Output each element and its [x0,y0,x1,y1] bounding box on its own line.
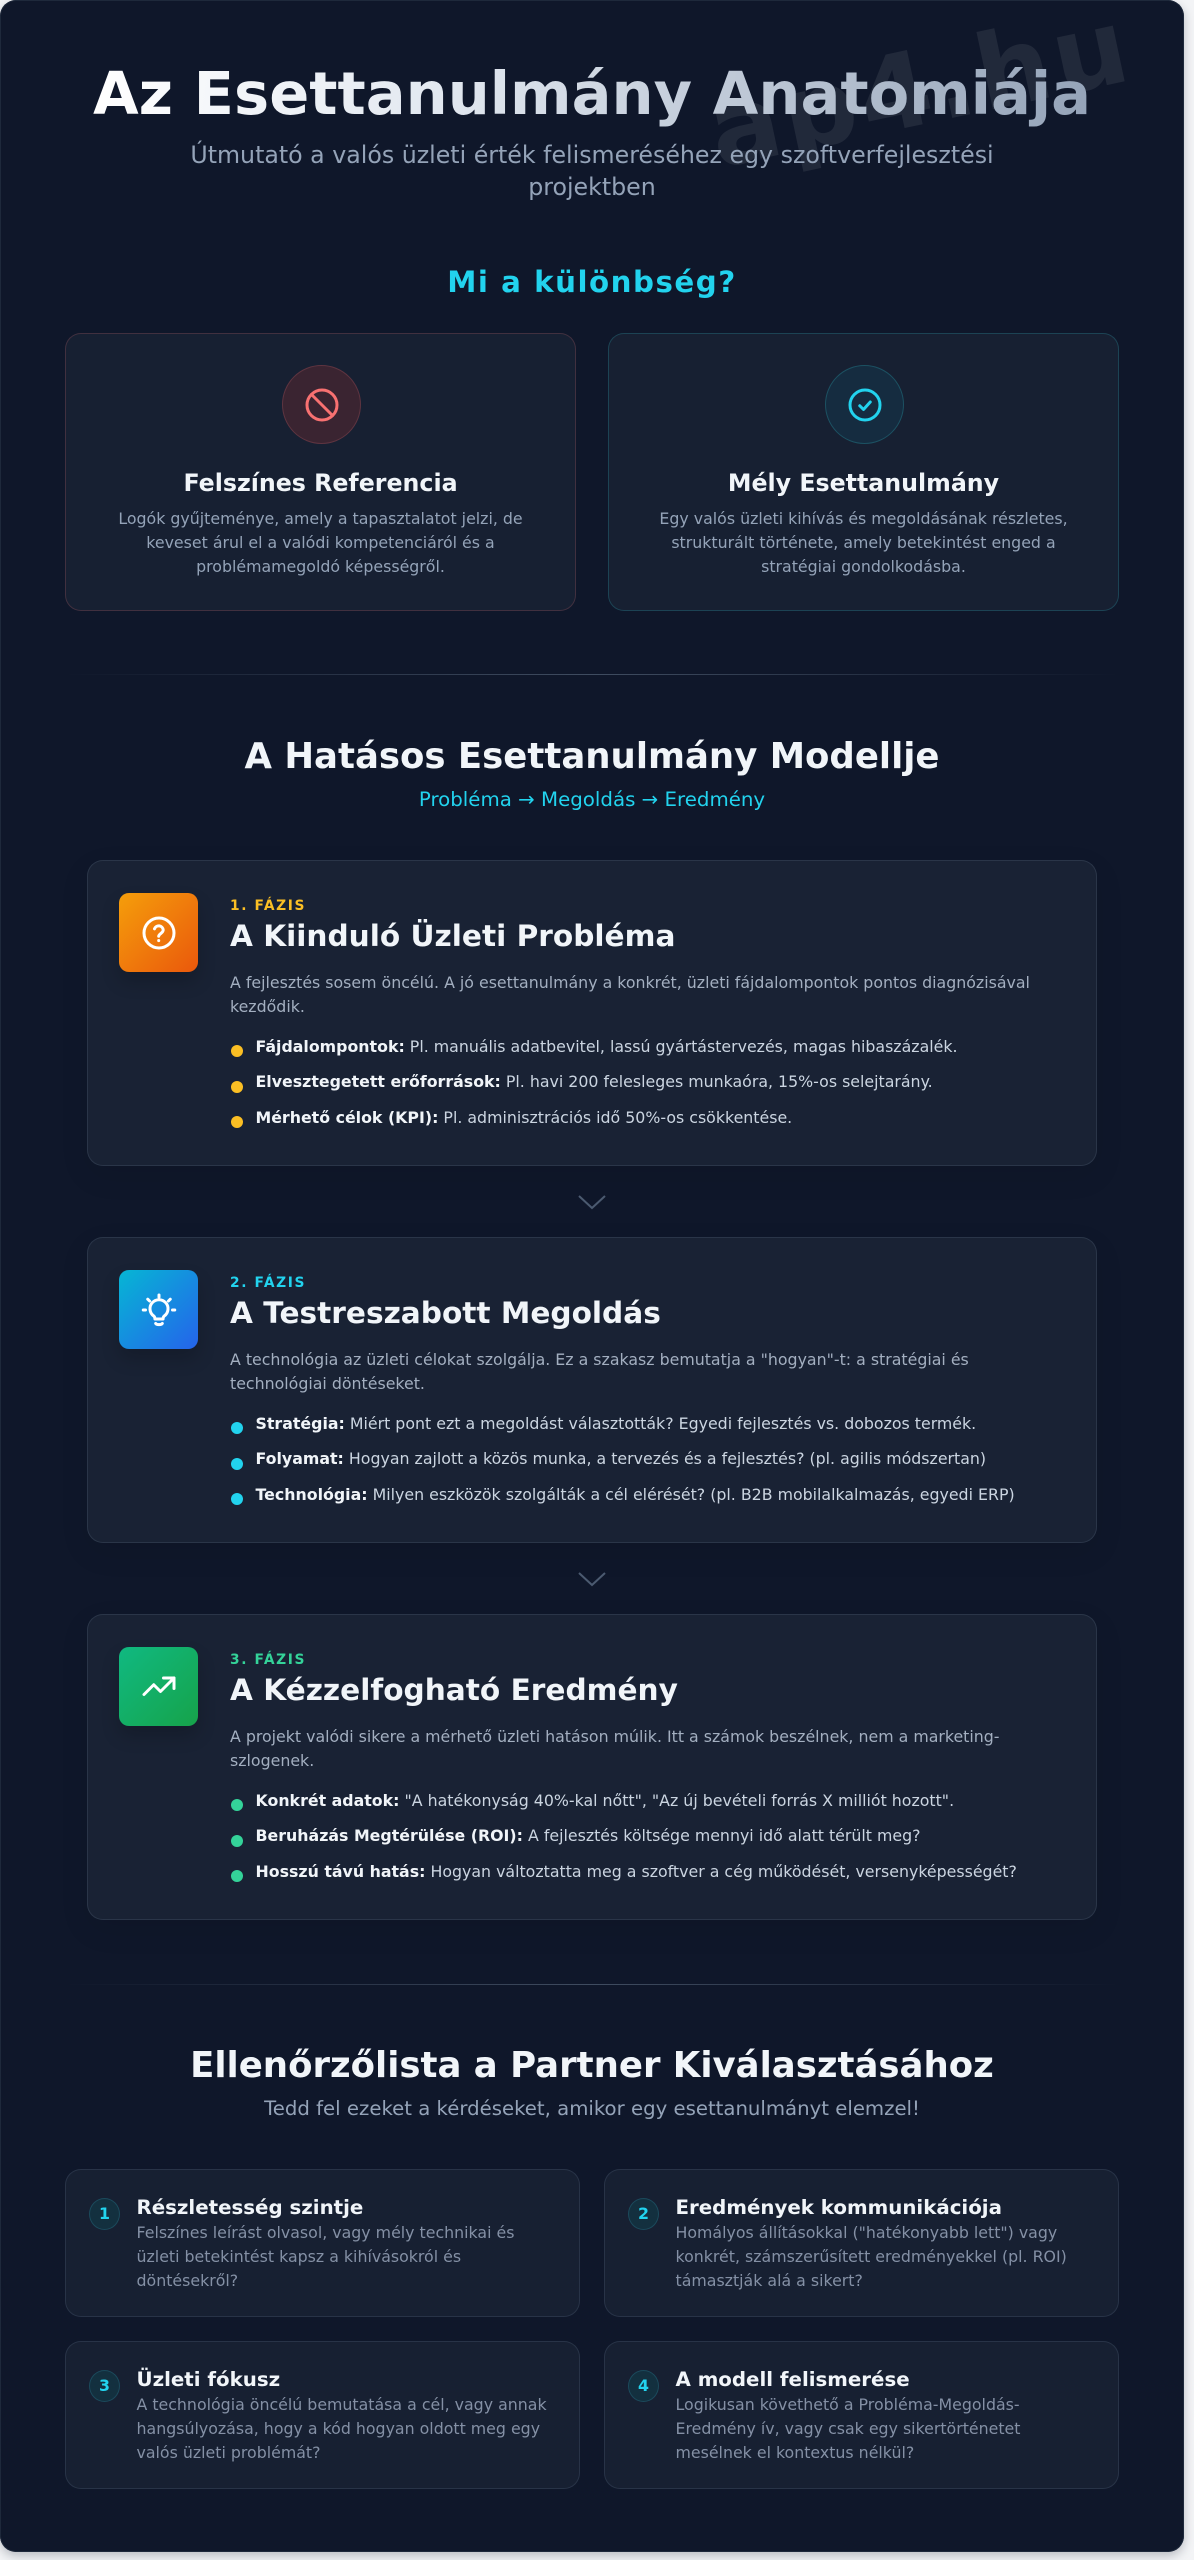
description: keveset árul el a valódi kompetenciáról és a [146,532,495,552]
number badge: 1 [99,2204,110,2223]
number badge [89,2198,120,2230]
description: strukturált története, amely betekintést enged a [671,532,1056,552]
phase label: 2. FÁZIS [230,1274,306,1290]
checklist card 3 [65,2341,580,2489]
bullet marker [231,1799,243,1811]
description [118,508,523,576]
description: mesélnek el kontextus nélkül? [676,2443,914,2462]
description [230,973,1030,1016]
panel: phase 2 [87,1237,1097,1543]
description: Logikusan követhető a Probléma-Megoldás- [676,2395,1020,2414]
description [676,2223,1067,2290]
description: valós üzleti problémát? [136,2443,320,2462]
bullet: Hosszú távú hatás: Hogyan változtatta meg a szoftver a cég működését, versenyképességét? [256,1862,1017,1880]
description: konkrét, számszerűsített eredményekkel (pl. ROI) [676,2247,1067,2266]
number badge: 2 [638,2204,649,2223]
number badge [89,2370,120,2402]
description: Felszínes leírást olvasol, vagy mély technikai és [136,2223,514,2242]
description: stratégiai gondolkodásba. [761,556,966,576]
model subtitle: Probléma → Megoldás → Eredmény [419,788,765,811]
description: szlogenek. [230,1751,314,1770]
arrow: chevron down [578,1195,606,1210]
bullet marker [231,1422,243,1434]
icon: ban [282,365,361,444]
checklist card 4 [604,2341,1119,2489]
icon: trending up [119,1647,198,1726]
checklist subtitle: Tedd fel ezeket a kérdéseket, amikor egy esettanulmányt elemzel! [264,2097,920,2120]
bullet: Beruházás Megtérülése (ROI): A fejlesztés költsége mennyi idő alatt térült meg? [256,1826,921,1844]
heading: A Kiinduló Üzleti Probléma [230,919,675,953]
description: A fejlesztés sosem öncélú. A jó esettanulmány a konkrét, üzleti fájdalompontok pontos diagnózisával [230,973,1030,992]
description: A technológia öncélú bemutatása a cél, vagy annak [136,2395,547,2414]
phase label: 1. FÁZIS [230,898,306,914]
icon: check [825,365,904,444]
bullet marker [231,1045,243,1057]
panel: surface reference [65,333,576,611]
description [676,2395,1020,2462]
subtitle [190,140,994,201]
bullet marker [231,1458,243,1470]
description: Egy valós üzleti kihívás és megoldásának részletes, [659,508,1068,528]
bullet: Folyamat: Hogyan zajlott a közös munka, a tervezés és a fejlesztés? (pl. agilis módszertan) [256,1448,986,1468]
bullet: Elvesztegetett erőforrások: Pl. havi 200 felesleges munkaóra, 15%-os selejtarány. [256,1072,933,1090]
bullet marker [231,1493,243,1505]
number badge: 3 [99,2376,110,2395]
heading: Mély Esettanulmány [728,469,999,497]
bullet: Technológia: Milyen eszközök szolgálták a cél elérését? (pl. B2B mobilalkalmazás, egyedi ERP) [256,1484,1015,1504]
panel: phase 1 [87,860,1097,1166]
bullet: Stratégia: Miért pont ezt a megoldást választották? Egyedi fejlesztés vs. dobozos termék. [256,1414,976,1432]
heading: A modell felismerése [676,2368,910,2391]
phase label: 3. FÁZIS [230,1652,306,1668]
number badge [628,2370,659,2402]
description [230,1727,1000,1770]
icon: question [119,893,198,972]
subtitle: Útmutató a valós üzleti érték felismeréséhez egy szoftverfejlesztési [190,141,994,169]
checklist card 1 [65,2169,580,2317]
description: Eredmény ív, vagy csak egy sikertörténetet [676,2419,1020,2438]
description: hangsúlyozása, hogy a kód hogyan oldott meg egy [136,2419,540,2438]
heading: Részletesség szintje [136,2196,363,2219]
heading: A Testreszabott Megoldás [230,1296,661,1330]
description: Homályos állításokkal ("hatékonyabb lett") vagy [676,2223,1057,2242]
description: kezdődik. [230,997,305,1016]
heading: Felszínes Referencia [183,469,458,497]
icon: lightbulb [119,1270,198,1349]
description: A projekt valódi sikere a mérhető üzleti hatáson múlik. Itt a számok beszélnek, nem a marketing- [230,1727,1000,1746]
bullet marker [231,1081,243,1093]
heading: checklist: Ellenőrzőlista a Partner Kiválasztásához [190,2045,994,2086]
heading: Eredmények kommunikációja [676,2196,1002,2219]
description [659,508,1068,576]
heading: model: A Hatásos Esettanulmány Modellje [244,736,940,777]
heading: A Kézzelfogható Eredmény [230,1673,678,1707]
checklist card 2 [604,2169,1119,2317]
description [230,1350,969,1393]
description: technológiai döntéseket. [230,1374,425,1393]
bullet marker [231,1116,243,1128]
description: A technológia az üzleti célokat szolgálja. Ez a szakasz bemutatja a "hogyan"-t: a stratégiai és [230,1350,969,1369]
heading: difference: Mi a különbség? [447,265,737,299]
subtitle: projektben [528,173,656,201]
title: Az Esettanulmány Anatomiája [93,59,1091,128]
description: döntésekről? [136,2271,238,2290]
bullet: Konkrét adatok: "A hatékonyság 40%-kal nőtt", "Az új bevételi forrás X milliót hozott". [256,1790,954,1810]
bullet marker [231,1835,243,1847]
description: üzleti betekintést kapsz a kihívásokról és [136,2247,461,2266]
description [136,2223,514,2290]
description [136,2395,547,2462]
heading: Üzleti fókusz [136,2368,280,2391]
panel: phase 3 [87,1614,1097,1920]
description: problémamegoldó képességről. [196,556,445,576]
arrow: chevron down [578,1572,606,1586]
panel: deep case study [608,333,1119,611]
bullet: Mérhető célok (KPI): Pl. adminisztrációs idő 50%-os csökkentése. [256,1108,792,1126]
description: Logók gyűjteménye, amely a tapasztalatot jelzi, de [118,508,523,528]
bullet marker [231,1870,243,1882]
bullet: Fájdalompontok: Pl. manuális adatbevitel, lassú gyártástervezés, magas hibaszázalék. [256,1036,958,1056]
description: támasztják alá a sikert? [676,2271,863,2290]
number badge [628,2198,659,2230]
number badge: 4 [638,2376,649,2395]
